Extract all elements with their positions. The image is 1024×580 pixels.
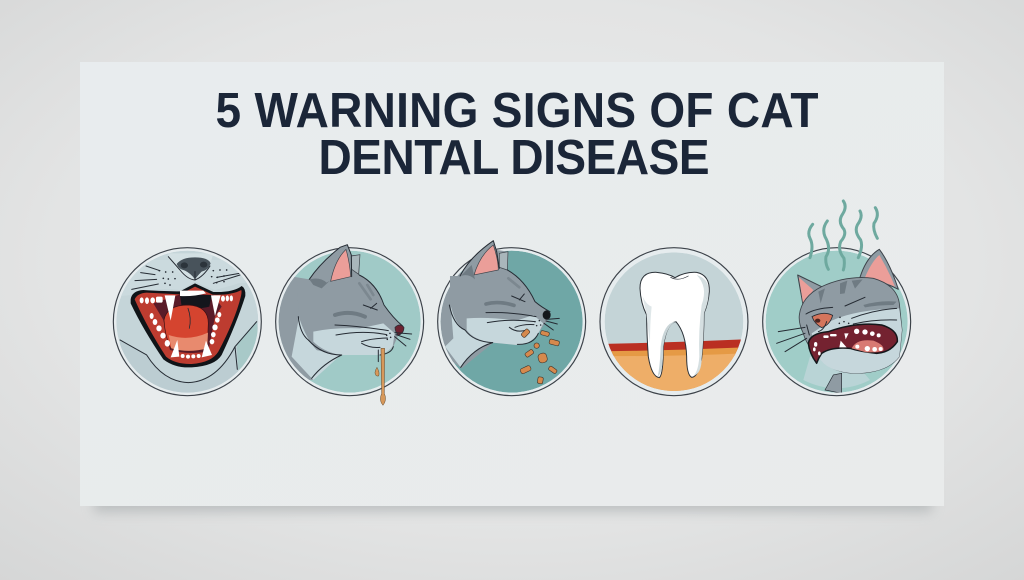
mouth — [808, 324, 897, 363]
icon: tooth with inflamed gum line — [597, 248, 748, 397]
icon: cat dropping food — [437, 241, 586, 396]
panel: main card — [80, 62, 944, 506]
kibble pieces — [520, 328, 560, 384]
icon: drooling cat — [273, 245, 424, 405]
head — [799, 278, 902, 373]
title: DENTAL DISEASE — [318, 131, 710, 185]
icon: bad breath cat — [763, 201, 911, 396]
icon: open mouth with inflamed gums — [113, 248, 261, 396]
ears — [798, 275, 822, 307]
odor wavy lines — [809, 201, 877, 270]
title — [216, 84, 818, 185]
title: 5 WARNING SIGNS OF CAT — [216, 84, 818, 138]
